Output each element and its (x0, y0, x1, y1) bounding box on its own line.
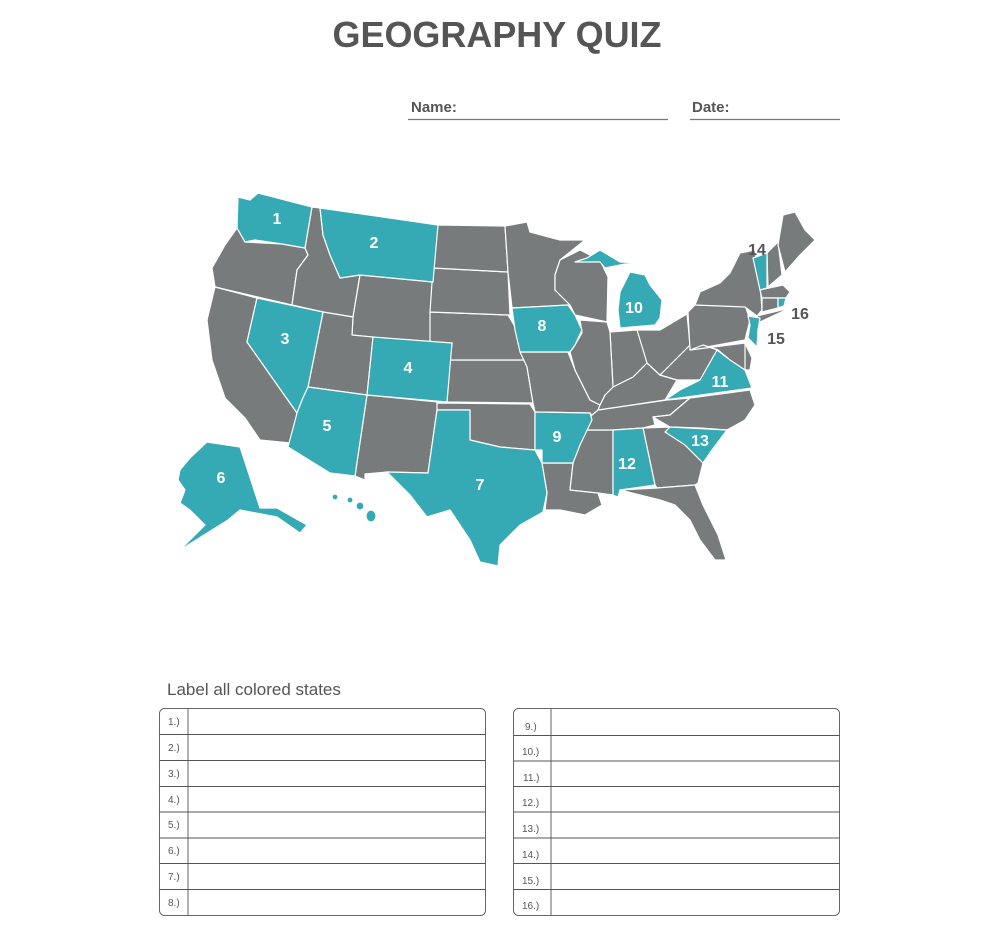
map labels: 6 (217, 470, 226, 487)
answer table: 1-8: 1.) (168, 717, 180, 728)
name field: Name: (411, 99, 457, 116)
map labels: 12 (618, 456, 636, 473)
answer table: 1-8: 6.) (168, 846, 180, 857)
answer table: 9-16: 10.) (522, 747, 539, 758)
map labels: 1 (273, 211, 282, 228)
answer table: 1-8: 4.) (168, 795, 180, 806)
answer table: 1-8: 5.) (168, 820, 180, 831)
date field: Date: (692, 99, 730, 116)
title: GEOGRAPHY QUIZ (332, 14, 662, 55)
map labels: 16 (791, 306, 809, 323)
map labels: 2 (370, 235, 379, 252)
answer table: 1-8: 2.) (168, 743, 180, 754)
map labels: 9 (553, 429, 562, 446)
answer table: 1-8 (160, 708, 486, 916)
colored states (237, 193, 312, 248)
answer table: 9-16: 13.) (522, 824, 539, 835)
map labels (217, 211, 809, 494)
answer table: 9-16: 14.) (522, 850, 539, 861)
answer table: 9-16 (514, 708, 840, 916)
answer table: 9-16: 9.) (525, 722, 537, 733)
answer table: 9-16: 12.) (522, 798, 539, 809)
answer table: 9-16: 15.) (522, 876, 539, 887)
answer table: 9-16: 11.) (523, 773, 540, 784)
answer table: 1-8: 3.) (168, 769, 180, 780)
map labels: 11 (712, 374, 729, 391)
map: US states (178, 193, 815, 566)
map labels: 14 (748, 242, 766, 259)
map labels: 8 (538, 318, 547, 335)
answer table: 1-8: 7.) (168, 872, 180, 883)
map labels: 5 (323, 418, 332, 435)
instruction text: Label all colored states (167, 680, 341, 699)
map labels: 7 (476, 477, 485, 494)
answer table: 1-8: 8.) (168, 898, 180, 909)
map labels: 13 (691, 433, 709, 450)
map labels: 3 (281, 331, 290, 348)
map labels: 10 (625, 300, 643, 317)
map labels: 15 (767, 331, 785, 348)
answer table: 9-16: 16.) (522, 901, 539, 912)
map labels: 4 (404, 360, 413, 377)
